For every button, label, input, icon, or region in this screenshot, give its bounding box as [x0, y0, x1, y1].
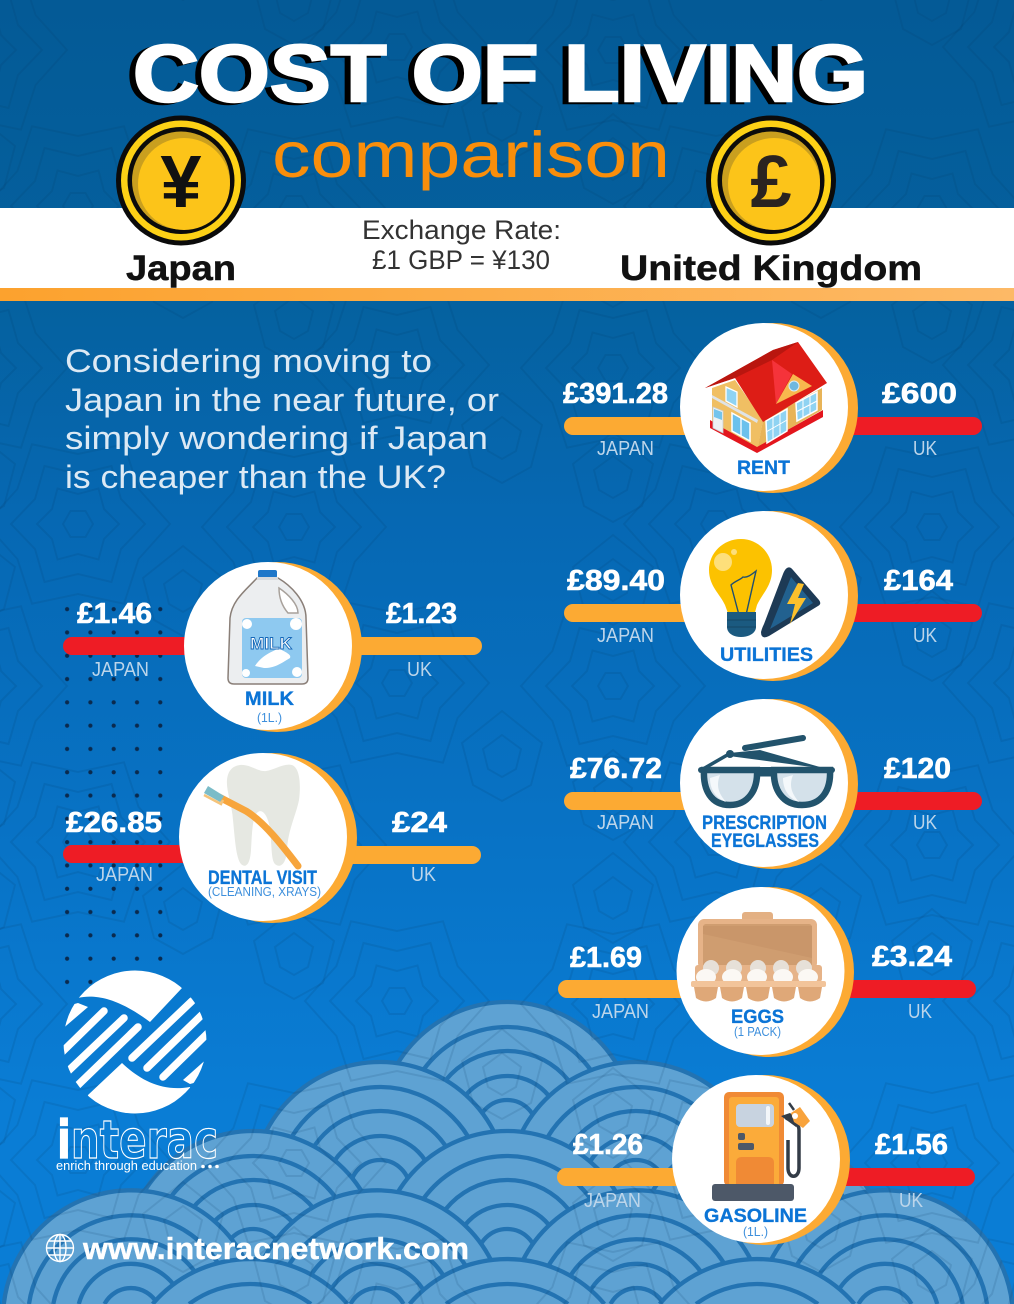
label: Japan: JAPAN: [592, 1001, 649, 1023]
label: gasoline: [704, 1206, 807, 1239]
orange divider strip: [0, 288, 1014, 301]
icon: yen coin: ¥: [160, 140, 202, 223]
label: Japan: JAPAN: [597, 812, 654, 834]
label: milk: [245, 689, 294, 725]
panel: gasoline: [557, 1075, 975, 1245]
label: Japan: JAPAN: [597, 625, 654, 647]
value: Japan milk: £1.46: [77, 598, 152, 630]
value: Japan utilities: £89.40: [567, 565, 665, 597]
label: gasoline: (1L.): [743, 1224, 768, 1239]
subtitle: comparison: [272, 118, 670, 191]
icon: power triangle: [761, 567, 820, 637]
label: gasoline: GASOLINE: [704, 1206, 807, 1227]
value: Japan dental: £26.85: [66, 807, 162, 839]
label: United Kingdom: United Kingdom: [620, 249, 922, 288]
intro text: simply wondering if Japan: [65, 420, 488, 456]
label: eggs: EGGS: [731, 1007, 784, 1028]
label: UK: UK: [899, 1190, 924, 1212]
label: dental visit: DENTAL VISIT: [208, 868, 317, 889]
icon: fuel pump: [712, 1092, 810, 1201]
icon: pound coin: [706, 116, 836, 246]
icon: yen coin: [116, 116, 246, 246]
value: UK eyeglasses: £120: [884, 753, 951, 785]
logo: interac wordmark: interac: [57, 1110, 218, 1171]
label: Japan: Japan: [126, 249, 236, 288]
icon: house: [705, 342, 827, 453]
label: Japan: JAPAN: [584, 1190, 641, 1212]
icon: egg carton: [691, 912, 826, 1002]
value: UK utilities: £164: [884, 565, 953, 597]
label: Japan: JAPAN: [597, 438, 654, 460]
exchange rate text: [362, 215, 561, 275]
label: prescription eyeglasses: EYEGLASSES: [711, 831, 819, 852]
icon: light bulb: [709, 539, 772, 637]
intro text: is cheaper than the UK?: [65, 459, 446, 495]
intro text: [65, 343, 499, 495]
label: UK: UK: [908, 1001, 933, 1023]
label: utilities: UTILITIES: [720, 645, 813, 666]
intro text: Considering moving to: [65, 343, 432, 379]
icon: milk jug: MILK: [250, 634, 293, 653]
label: UK: UK: [407, 659, 433, 681]
logo: tagline: enrich through education: [56, 1159, 197, 1173]
icon: tooth and toothbrush: [204, 765, 300, 866]
label: prescription eyeglasses: PRESCRIPTION: [702, 813, 827, 834]
panel: eggs: [558, 887, 976, 1057]
title: COST OF LIVING: [133, 29, 868, 119]
value: Japan eggs: £1.69: [570, 942, 642, 974]
label: Japan: JAPAN: [92, 659, 149, 681]
logo: interac emblem: [64, 970, 206, 1114]
exchange rate text: Exchange Rate:: [362, 215, 561, 245]
value: UK eggs: £3.24: [872, 941, 952, 973]
label: UK: UK: [411, 864, 437, 886]
label: UK: UK: [913, 812, 938, 834]
seigaiha wave pattern: [4, 1002, 1012, 1304]
exchange rate text: £1 GBP = ¥130: [372, 245, 550, 275]
dot grid: [56, 598, 172, 994]
website url: www.interacnetwork.com: [82, 1231, 469, 1266]
value: Japan gasoline: £1.26: [573, 1129, 643, 1161]
panel: utilities: [564, 511, 982, 681]
icon: globe: [46, 1234, 74, 1262]
title: COST OF LIVING: [127, 31, 862, 121]
icon: glasses: [701, 738, 832, 805]
value: UK rent: £600: [882, 378, 957, 410]
value: UK milk: £1.23: [386, 598, 457, 630]
label: eggs: (1 PACK): [734, 1024, 781, 1039]
panel: rent: [563, 323, 982, 493]
label: eggs: [731, 1007, 784, 1039]
panel: eyeglasses: [564, 699, 982, 869]
intro text: Japan in the near future, or: [65, 382, 499, 418]
value: Japan rent: £391.28: [563, 378, 668, 410]
panel: milk: [63, 562, 482, 732]
label: prescription eyeglasses: [702, 813, 827, 852]
label: rent: RENT: [737, 458, 790, 479]
label: Japan: JAPAN: [96, 864, 153, 886]
label: milk: (1L.): [257, 710, 282, 725]
label: dental visit: (CLEANING, XRAYS): [208, 884, 321, 899]
value: UK gasoline: £1.56: [875, 1129, 948, 1161]
label: UK: UK: [913, 625, 938, 647]
value: UK dental: £24: [392, 807, 447, 839]
panel: dental visit: [63, 753, 481, 923]
icon: milk jug: [228, 570, 308, 684]
icon: pound coin: £: [750, 140, 792, 223]
value: Japan eyeglasses: £76.72: [570, 753, 662, 785]
label: milk: MILK: [245, 689, 294, 710]
label: UK: UK: [913, 438, 938, 460]
label: dental visit: [208, 868, 321, 899]
white exchange band: [0, 208, 1014, 288]
